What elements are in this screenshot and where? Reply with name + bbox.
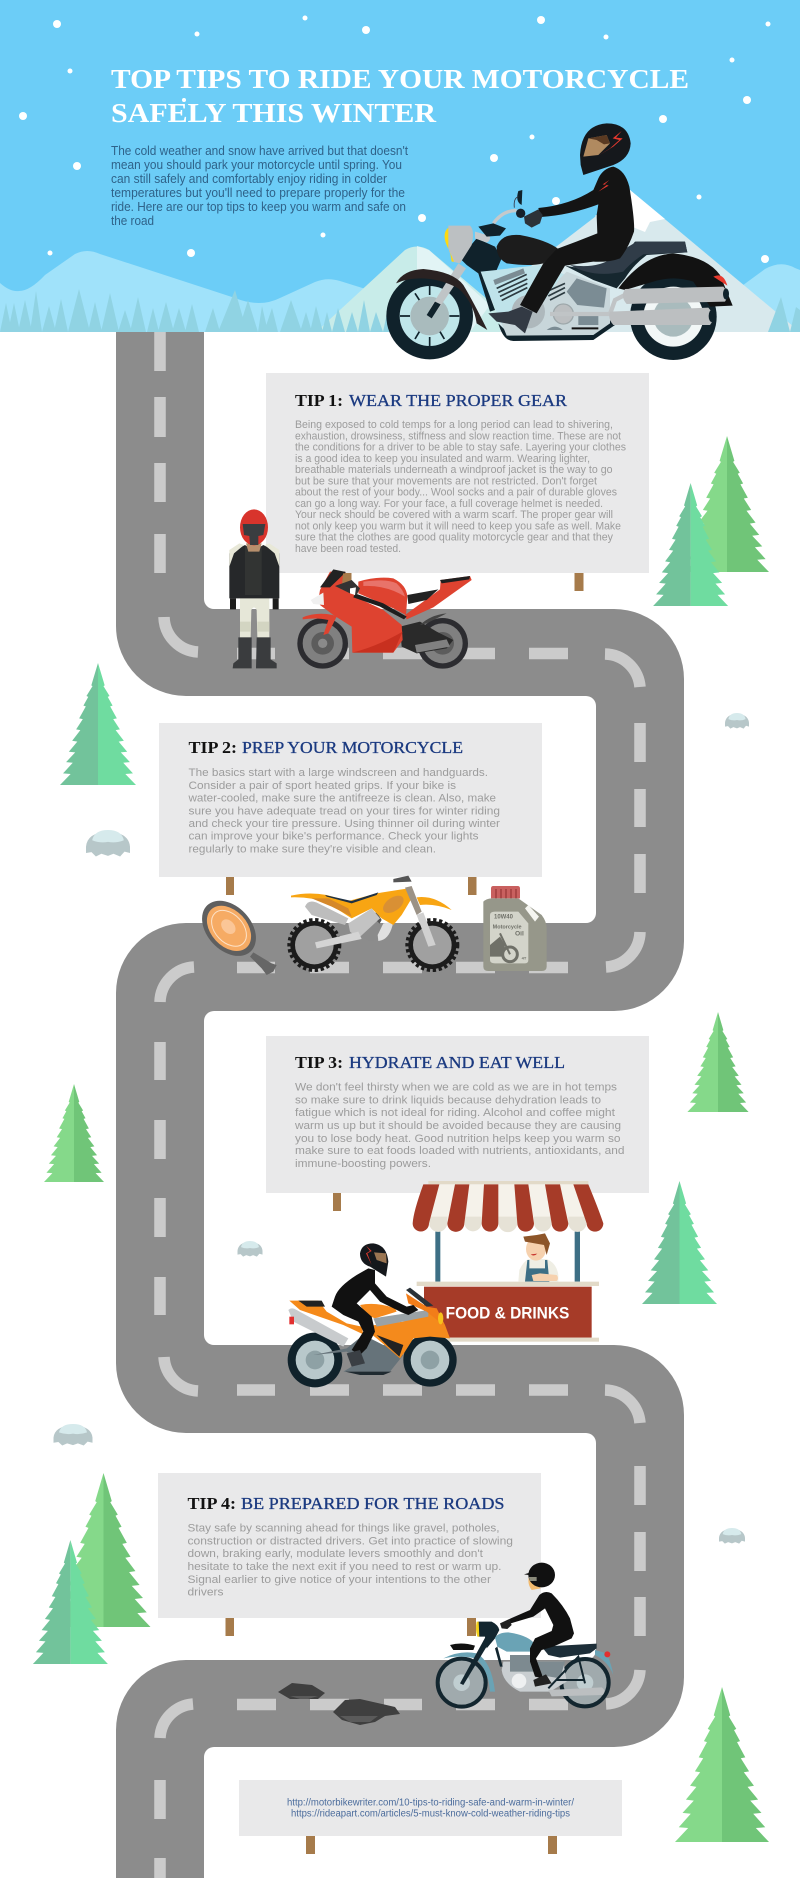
headlight bbox=[478, 1622, 499, 1648]
tree: lower right bbox=[675, 1687, 769, 1842]
red sport bike bbox=[297, 569, 472, 669]
title bbox=[111, 63, 689, 128]
body: tip 1: have been road tested. bbox=[295, 543, 401, 555]
heading: tip 1: TIP 1: bbox=[295, 391, 343, 410]
rear fender bbox=[618, 253, 733, 307]
headlight mirror bbox=[191, 890, 277, 975]
body: tip 4 bbox=[188, 1522, 513, 1598]
tree line bbox=[0, 289, 800, 332]
rear wheel bbox=[289, 920, 340, 970]
bodywork bbox=[291, 888, 412, 925]
gloves bbox=[230, 598, 279, 609]
oil label: 10W40 bbox=[494, 914, 514, 920]
engine bbox=[362, 912, 382, 932]
blue classic motorcycle and rider bbox=[438, 1563, 613, 1707]
heading: tip 1: WEAR THE PROPER GEAR bbox=[349, 391, 567, 410]
front fender bbox=[303, 614, 337, 635]
tree: left of tip 2 bbox=[60, 663, 136, 785]
rider helmet bbox=[360, 1243, 388, 1277]
intro text: ride. Here are our top tips to keep you warm and safe on bbox=[111, 199, 406, 214]
heading: tip 2: TIP 2: bbox=[188, 738, 237, 757]
rider glove bbox=[524, 209, 543, 228]
rider head bbox=[524, 1563, 555, 1590]
headlight bbox=[448, 226, 473, 263]
exhaust bbox=[548, 1687, 604, 1696]
front wheel bbox=[386, 273, 473, 359]
body: tip 1: can go a long way. For your face, a full coverage helmet is needed. bbox=[295, 498, 603, 510]
frame and engine bbox=[313, 1335, 403, 1372]
tree: left of tip 3 bbox=[44, 1084, 104, 1182]
body: tip 3: We don't feel thirsty when we are cold as we are in hot temps bbox=[295, 1082, 617, 1094]
swingarm bbox=[315, 932, 362, 948]
poles bbox=[435, 1232, 580, 1282]
neck bbox=[246, 543, 262, 552]
rider bbox=[509, 1592, 574, 1678]
body: tip 1: exhaustion, drowsiness, stiffness and slow reaction time. These are not bbox=[295, 430, 622, 442]
engine bbox=[502, 1662, 567, 1692]
source links bbox=[287, 1798, 574, 1820]
body: tip 3: fatigue which is not ideal for riding. Alcohol and coffee might bbox=[295, 1107, 616, 1119]
body: tip 1 bbox=[295, 419, 626, 555]
tail bbox=[405, 576, 472, 619]
panel: tip 1 bbox=[266, 373, 649, 591]
fairing bbox=[362, 1308, 450, 1358]
seat bbox=[542, 1644, 597, 1658]
boots bbox=[233, 637, 277, 668]
body: tip 1: Your neck should be covered with a warm scarf. The proper gear will bbox=[295, 509, 613, 521]
oil label: 4T bbox=[522, 955, 527, 960]
title: SAFELY THIS WINTER bbox=[111, 97, 437, 128]
tank bbox=[495, 1632, 533, 1652]
panel: tip 2 bbox=[159, 723, 542, 895]
wheels bbox=[403, 1333, 457, 1387]
vendor bbox=[518, 1233, 558, 1282]
rider boot bbox=[488, 307, 533, 333]
chrome engine base bbox=[502, 272, 610, 336]
body: tip 3: make sure to eat foods loaded with nutrients, antioxidants, and bbox=[295, 1145, 624, 1157]
tail light bbox=[713, 275, 727, 286]
heading: tip 2: PREP YOUR MOTORCYCLE bbox=[242, 738, 463, 757]
engine and swingarm bbox=[400, 622, 453, 653]
orange dirt bike bbox=[289, 876, 458, 970]
source links: http://motorbikewriter.com/10-tips-to-riding-safe-and-warm-in-winter/ bbox=[287, 1798, 574, 1808]
wheels bbox=[297, 618, 348, 669]
snow falling bbox=[19, 16, 770, 263]
tank bbox=[358, 578, 407, 615]
body: tip 4: drivers bbox=[188, 1586, 224, 1598]
counter bbox=[424, 1287, 592, 1338]
big snowy mountain bbox=[316, 190, 800, 332]
body: tip 1: is a good idea to keep you insulated and warm. Wearing lighter, bbox=[295, 453, 590, 465]
body: tip 2: water-cooled, make sure the antifreeze is clean. Also, make bbox=[187, 792, 496, 804]
fairing bbox=[318, 572, 403, 653]
frame bbox=[548, 1657, 585, 1688]
heading: tip 3: TIP 3: bbox=[295, 1053, 343, 1072]
body: tip 2 bbox=[187, 767, 500, 856]
body: tip 1: the conditions for a driver to be able to stay safe. Layering your clothes bbox=[295, 442, 626, 454]
body: tip 2: regularly to make sure they're visible and clean. bbox=[188, 844, 436, 856]
body: tip 2: and check your tire pressure. Using thinner oil during winter bbox=[188, 818, 500, 830]
standing rider in gear bbox=[229, 509, 279, 668]
body: tip 2: Consider a pair of sport heated grips. If your bike is bbox=[188, 780, 456, 792]
engine bay bbox=[480, 265, 610, 328]
trees: upper right pair bbox=[653, 436, 769, 606]
rider body bbox=[520, 167, 634, 313]
oil label: Motorcycle bbox=[493, 924, 522, 930]
counter top bbox=[417, 1282, 599, 1286]
arm lightning bbox=[598, 180, 609, 192]
panel: tip 4 bbox=[158, 1473, 541, 1636]
body: tip 3 bbox=[294, 1082, 624, 1170]
body: tip 1: Being exposed to cold temps for a long period can lead to shivering, bbox=[295, 419, 613, 431]
snow rocks bbox=[54, 713, 749, 1544]
body: tip 1: breathable materials underneath a windproof jacket is the way to go bbox=[295, 464, 612, 476]
exhaust bbox=[288, 1308, 348, 1347]
body: tip 4: hesitate to take the next exit if you need to rest or warm up. bbox=[188, 1561, 502, 1573]
frame bbox=[460, 238, 625, 341]
torso bbox=[229, 545, 279, 598]
body: tip 1: about the rest of your body... Wool socks and a pair of durable gloves bbox=[295, 486, 617, 498]
body: tip 1: not only keep you warm but it will need to keep you safe as well. Make bbox=[295, 520, 621, 532]
panel: tip 3 bbox=[266, 1036, 649, 1211]
body: tip 2: The basics start with a large windscreen and handguards. bbox=[188, 767, 488, 779]
fork bbox=[405, 886, 422, 915]
sky background bbox=[0, 0, 800, 332]
intro text bbox=[111, 143, 408, 228]
trees: lower left pair bbox=[33, 1473, 150, 1664]
oil label bike bbox=[490, 933, 517, 962]
heading: tip 4: TIP 4: bbox=[188, 1494, 236, 1513]
body: tip 3: warm us up but it should be avoided because they are causing bbox=[294, 1120, 621, 1132]
intro text: can still safely and comfortably enjoy riding in colder bbox=[111, 171, 388, 186]
fenders bbox=[443, 1652, 495, 1692]
tree: right of tip 3 top bbox=[687, 1012, 749, 1112]
body: tip 3: immune-boosting powers. bbox=[295, 1158, 431, 1170]
rider helmet bbox=[580, 123, 631, 175]
oil jug bbox=[483, 886, 547, 971]
road centre line bbox=[160, 332, 640, 1878]
body: tip 4: Signal earlier to give notice of your intentions to the other bbox=[188, 1574, 491, 1586]
body: tip 2: sure you have adequate tread on your tires for winter riding bbox=[188, 806, 500, 818]
body: tip 4: Stay safe by scanning ahead for things like gravel, potholes, bbox=[188, 1522, 500, 1534]
shoulders bbox=[229, 543, 279, 567]
intro text: the road bbox=[111, 213, 154, 228]
awning bbox=[413, 1181, 603, 1232]
body: tip 1: sure that the clothes are good quality motorcycle gear and that they bbox=[295, 532, 613, 544]
body: tip 3: so make sure to drink liquids because dehydration leads to bbox=[295, 1094, 601, 1106]
body: tip 3: you to lose body heat. Good nutrition helps keep you warm so bbox=[295, 1133, 620, 1145]
front fork and fender bbox=[430, 263, 466, 312]
oil label: Oil bbox=[515, 930, 524, 937]
seat bbox=[565, 242, 687, 288]
far mountains bbox=[0, 251, 800, 332]
food and drinks stand bbox=[413, 1181, 603, 1342]
engine block bbox=[493, 268, 607, 330]
panel: sources bbox=[239, 1780, 622, 1854]
heading: tip 3: HYDRATE AND EAT WELL bbox=[349, 1053, 565, 1072]
rear wheel bbox=[630, 273, 717, 360]
orange sport bike and rider bbox=[288, 1243, 457, 1387]
potholes bbox=[278, 1683, 400, 1725]
wheels bbox=[438, 1659, 486, 1707]
tree: right of food stand bbox=[642, 1181, 717, 1304]
body: tip 1: but be sure that your movements are not restricted. Don't forget bbox=[295, 475, 598, 487]
exhaust bbox=[305, 901, 348, 925]
road bbox=[116, 332, 684, 1878]
cruiser motorcycle and rider bbox=[386, 123, 733, 360]
body: tip 4: construction or distracted drivers. Get into practice of slowing bbox=[188, 1536, 513, 1548]
intro text: temperatures but you'll need to prepare properly for the bbox=[111, 185, 405, 200]
handlebar bbox=[393, 876, 412, 882]
counter label: FOOD & DRINKS bbox=[446, 1303, 569, 1322]
exhaust pipes bbox=[550, 287, 729, 325]
title: TOP TIPS TO RIDE YOUR MOTORCYCLE bbox=[111, 63, 689, 94]
fork bbox=[460, 1637, 492, 1685]
source links: https://rideapart.com/articles/5-must-know-cold-weather-riding-tips bbox=[291, 1808, 570, 1820]
helmet bbox=[240, 509, 268, 545]
tail and seat bbox=[289, 1301, 363, 1334]
tank bbox=[360, 1304, 397, 1318]
body: tip 4: down, braking early, modulate levers smoothly and don't bbox=[188, 1548, 484, 1560]
legs bbox=[240, 594, 269, 637]
oil label bbox=[493, 914, 527, 960]
handlebar and mirror bbox=[493, 211, 517, 223]
body: tip 2: can improve your bike's performance. Check your lights bbox=[188, 830, 479, 842]
front wheel bbox=[407, 920, 458, 970]
heading: tip 4: BE PREPARED FOR THE ROADS bbox=[241, 1494, 504, 1513]
intro text: The cold weather and snow have arrived but that doesn't bbox=[111, 143, 408, 158]
intro text: mean you should park your motorcycle until spring. You bbox=[111, 157, 402, 172]
rider bbox=[332, 1268, 418, 1355]
tank bbox=[497, 235, 558, 265]
